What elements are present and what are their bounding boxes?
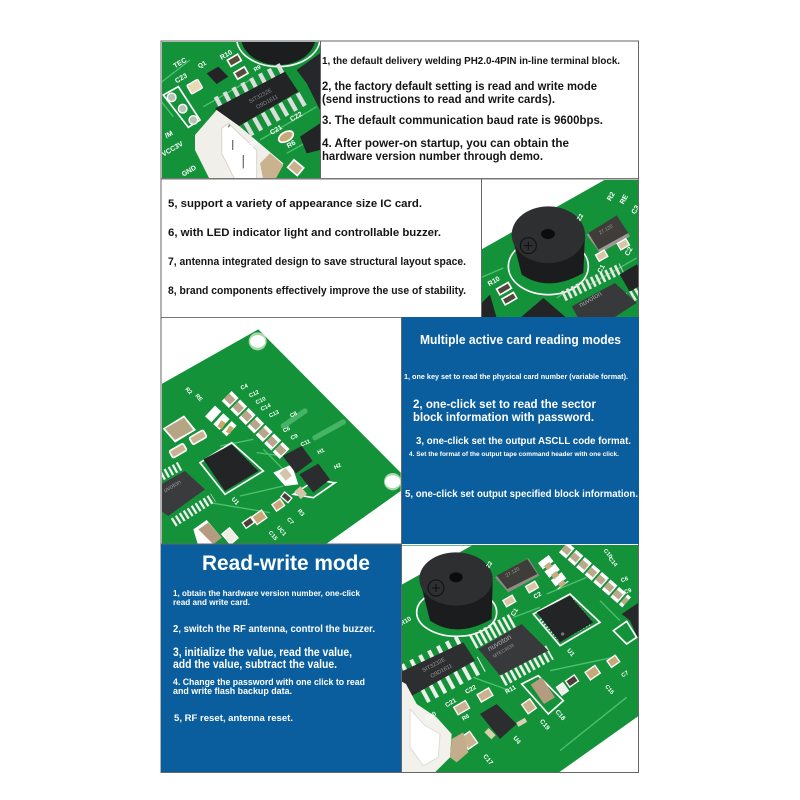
text block: read-write list: read and write card. (173, 597, 250, 607)
text block: features 5 to 8: 7, antenna integrated design to save structural layout space. (168, 256, 466, 268)
text block: read-write list: add the value, subtract the value. (173, 659, 337, 671)
panel: antenna board photo: C14 (260, 403, 273, 413)
panel: terminal block photo: VCC3V (161, 141, 185, 158)
panel: antenna board photo: C12 (248, 390, 260, 399)
panel: antenna board photo: RE (194, 393, 203, 403)
panel: buzzer photo: RE (619, 193, 630, 206)
divider: first row rule (161, 178, 638, 180)
panel: full board photo: U1 (565, 647, 576, 659)
panel: terminal block photo (162, 42, 320, 178)
panel: buzzer photo (480, 179, 647, 318)
panel: full board photo: C14 (607, 556, 619, 569)
panel: terminal block photo: SIT3232E (248, 88, 273, 105)
panel: full board photo: C18 (554, 709, 567, 722)
text block: read-write list: and write flash backup data. (173, 686, 292, 696)
text block: reading mode list (404, 372, 638, 500)
text block: reading mode list: block information with password. (413, 410, 594, 424)
panel: terminal block photo: C23 (174, 73, 189, 85)
panel: full board photo: R10 (399, 615, 413, 627)
panel: full board photo: C1 (510, 607, 520, 618)
panel: terminal block photo: C20 (244, 139, 259, 152)
panel: full board photo: R6 (461, 714, 471, 722)
panel: antenna board photo (161, 318, 402, 546)
panel: antenna board photo: C4 (240, 383, 250, 392)
panel: full board photo: C22 (464, 684, 478, 696)
panel: buzzer photo: 27.120 (598, 223, 614, 236)
panel: full board photo: C19 (538, 718, 551, 732)
panel: antenna board photo: R3 (296, 508, 305, 518)
heading: read-write mode: Read-write mode (202, 552, 370, 575)
panel: full board photo: 27.120 (505, 566, 521, 579)
panel: read-write mode (161, 544, 401, 772)
text block: features 1 to 4: 1, the default delivery welding PH2.0-4PIN in-line terminal block. (322, 56, 620, 67)
panel: terminal block photo: Q1 (197, 60, 208, 70)
text block: features 5 to 8: 6, with LED indicator light and controllable buzzer. (168, 227, 441, 239)
panel: antenna board photo: uvoton (162, 479, 183, 494)
panel: antenna board photo: C7 (285, 517, 294, 526)
panel: antenna board photo: C8 (289, 411, 298, 419)
panel: full board photo: MTEC3633 (492, 643, 515, 659)
panel: multiple active card reading modes (401, 317, 639, 544)
panel: full board photo: C20 (424, 710, 438, 722)
panel: buzzer photo: C3 (631, 204, 641, 216)
panel: terminal block photo: O9D1611 (255, 94, 279, 111)
panel: buzzer photo: nuvoton (578, 291, 603, 309)
panel: antenna board photo: U1 (230, 496, 241, 507)
text block: read-write list: 4. Change the password with one click to read (173, 677, 365, 687)
panel: antenna board photo: H2 (333, 463, 342, 471)
panel: full board photo: Z2 (486, 561, 494, 569)
panel: full board photo: C10 (602, 548, 613, 560)
panel: full board photo: C21 (444, 697, 458, 709)
panel: full board photo: C7 (621, 670, 630, 679)
text block: features 1 to 4: 4. After power-on startup, you can obtain the (322, 138, 569, 150)
panel: antenna board photo: C6 (282, 426, 291, 434)
text block: features 1 to 4: hardware version number through demo. (322, 151, 543, 163)
text block: features 1 to 4: 3. The default communication baud rate is 9600bps. (322, 115, 603, 127)
text block: features 1 to 4: (send instructions to read and write cards). (322, 94, 555, 106)
text block: features 5 to 8: 8, brand components effectively improve the use of stability. (168, 285, 466, 297)
panel: buzzer photo: C2 (624, 246, 635, 257)
panel: full board photo: U4 (511, 735, 522, 746)
divider: column and frame rules (161, 41, 482, 772)
text block: reading mode list: 5, one-click set output specified block information. (405, 488, 638, 500)
panel: terminal block photo: GND (181, 165, 198, 178)
panel: antenna board photo: R2 (184, 387, 193, 396)
panel: full board photo: O9D1611 (430, 663, 454, 680)
panel: terminal block photo: /M (164, 130, 175, 140)
text block: read-write list (173, 588, 375, 724)
text block: reading mode list: 2, one-click set to read the sector (413, 397, 596, 411)
panel: antenna board photo: H1 (317, 448, 326, 456)
panel: antenna board photo: UC1 (275, 525, 287, 538)
panel: full board photo: C6 (620, 576, 629, 584)
text block: features 5 to 8 (168, 198, 466, 297)
panel: terminal block photo: C22 (289, 111, 304, 123)
divider: second row rule (161, 317, 638, 318)
text block: read-write list: 1, obtain the hardware version number, one-click (173, 588, 360, 598)
text block: reading mode list: 1, one key set to read the physical card number (variable format). (404, 372, 628, 381)
text block: read-write list: 2, switch the RF antenna, control the buzzer. (173, 624, 375, 635)
heading: multiple active card reading modes: Multiple active card reading modes (420, 333, 621, 347)
panel: antenna board photo: C10 (255, 396, 267, 406)
panel: full board photo (399, 544, 639, 774)
panel: terminal block photo: TEC (172, 57, 188, 70)
panel: terminal block photo: R10 (219, 49, 234, 62)
panel: terminal block photo: C21 (269, 124, 284, 137)
panel: full board photo: C17 (481, 753, 494, 767)
text block: read-write list: 5, RF reset, antenna reset. (174, 713, 293, 724)
panel: terminal block photo: R9 (253, 65, 262, 73)
panel: full board photo: C9 (624, 588, 632, 596)
text block: features 1 to 4 (322, 56, 620, 163)
text block: reading mode list: 4. Set the format of the output tape command header with one click. (409, 451, 619, 458)
panel: antenna board photo: C13 (268, 410, 280, 419)
panel: outer frame (161, 41, 638, 772)
panel: buzzer photo: R2 (606, 191, 617, 202)
text block: reading mode list: 3, one-click set the output ASCLL code format. (416, 435, 631, 447)
panel: full board photo: R11 (504, 684, 518, 696)
panel: buzzer photo: R10 (487, 276, 502, 288)
panel: terminal block photo: R6 (286, 139, 297, 150)
panel: buzzer photo: C1 (597, 263, 607, 275)
panel: full board photo: nuvoton (486, 632, 513, 653)
panel: full board photo: C15 (603, 684, 615, 696)
panel: full board photo: SIT3232E (421, 657, 447, 674)
panel: full board photo: C2 (532, 590, 543, 601)
panel: buzzer photo: Z2 (577, 213, 586, 222)
panel: antenna board photo: C15 (267, 530, 278, 542)
text block: features 5 to 8: 5, support a variety of appearance size IC card. (168, 198, 422, 210)
text block: features 1 to 4: 2, the factory default setting is read and write mode (322, 81, 597, 93)
panel: antenna board photo: C9 (290, 433, 299, 442)
panel: antenna board photo: C11 (300, 439, 312, 448)
text block: read-write list: 3, initialize the value, read the value, (173, 647, 352, 659)
